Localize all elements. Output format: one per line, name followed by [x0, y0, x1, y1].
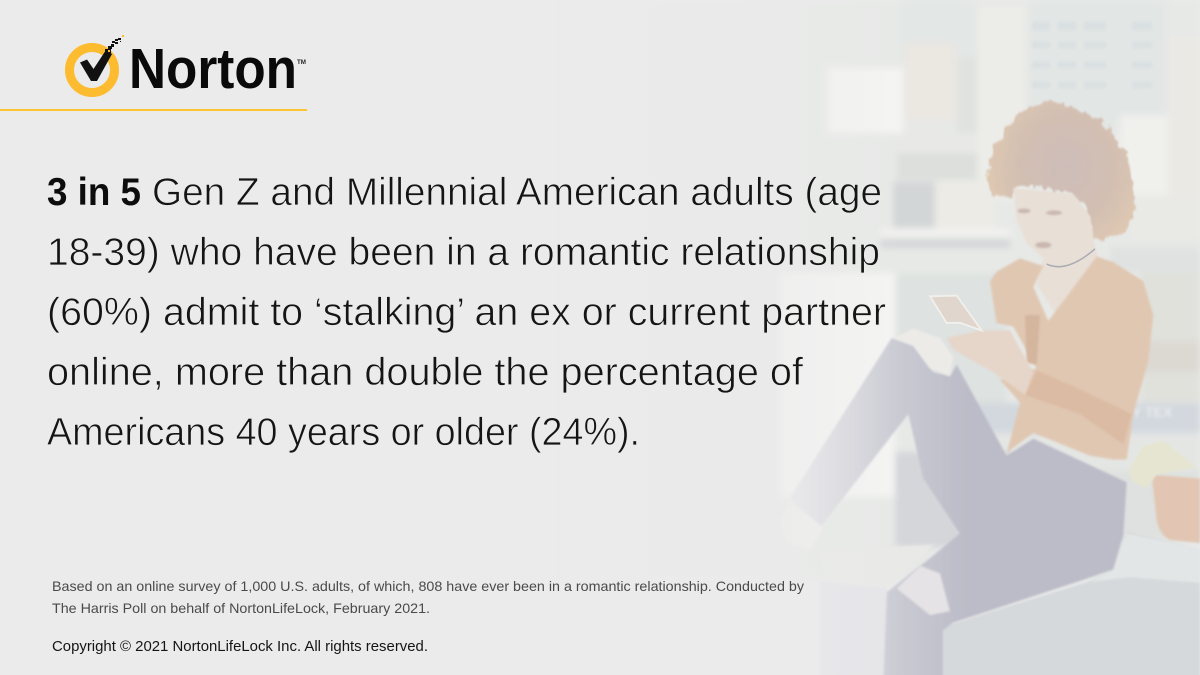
- woman: orange top: [990, 256, 1153, 460]
- highlight: 3 in 5: 3 in 5: [47, 171, 141, 214]
- woman: eyes and lips: [1017, 209, 1062, 248]
- logo: Norton: [70, 35, 306, 101]
- photo: blurred sign lettering: Y TEX: [1132, 404, 1173, 420]
- logo icon: yellow ring with checkmark: [70, 35, 124, 92]
- body line 5: Americans 40 years or older (24%).: [47, 411, 640, 454]
- survey footnote: Based on an online survey of 1,000 U.S. adults, of which, 808 have ever been in a romantic relationship. Conducted by: [52, 578, 804, 594]
- plant: [1128, 441, 1197, 488]
- logo trademark: TM: [297, 59, 306, 66]
- woman: foot: [780, 501, 823, 551]
- woman: smartphone: [930, 296, 982, 330]
- ledge: [820, 532, 1200, 675]
- yellow rule under logo: [0, 109, 307, 111]
- woman: neckline tie: [1025, 315, 1040, 365]
- fade overlay over photo: [560, 0, 900, 675]
- survey footnote: [52, 578, 804, 616]
- body line 4: online, more than double the percentage of: [47, 351, 803, 394]
- body line 1: Gen Z and Millennial American adults (age: [152, 171, 882, 214]
- copyright line: Copyright © 2021 NortonLifeLock Inc. All rights reserved.: [52, 639, 428, 655]
- main statistic text: [47, 171, 886, 454]
- woman: hand: [947, 330, 1033, 395]
- flower pot: [1152, 475, 1200, 543]
- logo wordmark: Norton: [129, 37, 297, 101]
- woman: hair: [987, 101, 1137, 241]
- woman: sleeve: [1025, 370, 1132, 444]
- woman: pants: [790, 338, 1127, 675]
- woman: face and neck: [1013, 188, 1100, 315]
- survey footnote: The Harris Poll on behalf of NortonLifeLock, February 2021.: [52, 600, 430, 616]
- woman: lower knee: [897, 566, 950, 615]
- photo: city skyline background: [560, 0, 1200, 580]
- woman: bare knee: [893, 329, 953, 376]
- woman: choker necklace: [1047, 249, 1095, 267]
- photo: woman, ledge and plant: [780, 101, 1200, 675]
- body line 2: 18-39) who have been in a romantic relationship: [47, 231, 880, 274]
- body line 3: (60%) admit to ‘stalking’ an ex or current partner: [47, 291, 886, 334]
